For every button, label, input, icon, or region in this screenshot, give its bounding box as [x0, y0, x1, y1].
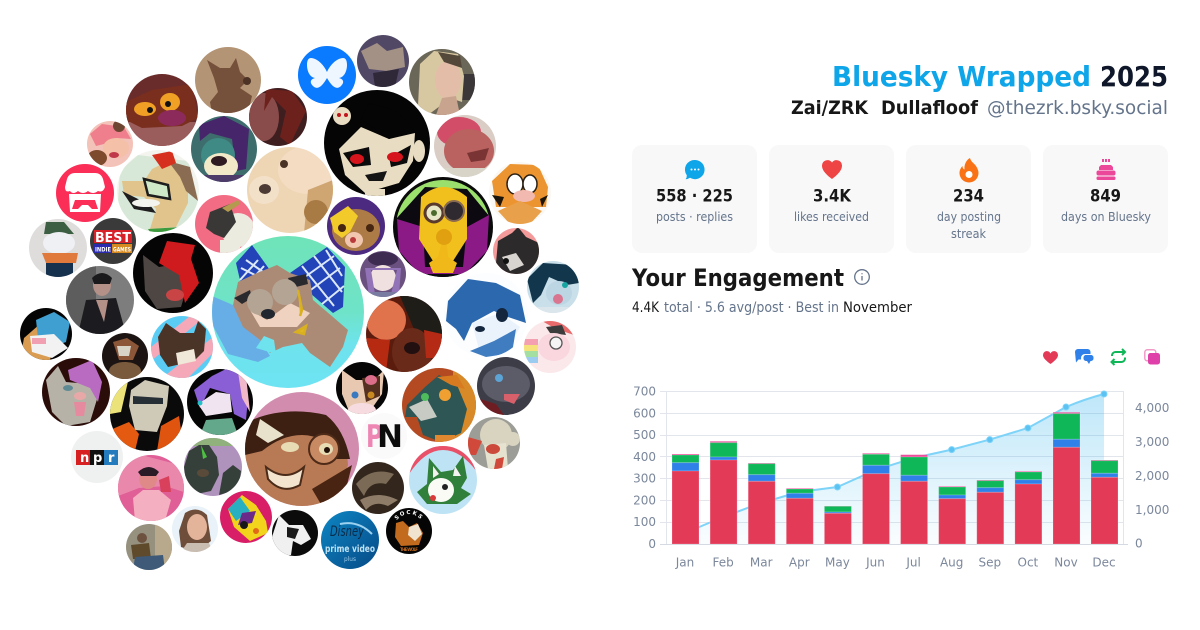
- month labels: May: [825, 556, 850, 570]
- avatar: best indie games: [90, 218, 136, 264]
- right axis labels: 1,000: [1135, 503, 1169, 517]
- avatar: NPR logo: p: [93, 451, 102, 466]
- avatar: man with laptop: [126, 524, 172, 570]
- panel: days on Bluesky: [1043, 145, 1168, 253]
- month labels: [675, 556, 1116, 570]
- month labels: Dec: [1092, 556, 1116, 570]
- avatar: green wolf with orange eye: [402, 368, 476, 442]
- avatar: best indie games: GAMES: [113, 246, 131, 254]
- avatar: disney prime video: [321, 511, 379, 569]
- avatar: golden dog photo: [247, 146, 338, 233]
- title: Bluesky Wrapped: [832, 60, 1091, 93]
- avatar: disney prime video: Disney: [330, 524, 364, 540]
- right axis labels: [1135, 401, 1169, 550]
- avatar: bluesky butterfly logo: [298, 46, 356, 104]
- panel: day posting streak: 234: [953, 186, 984, 206]
- avatar: dog on trans flag: [151, 316, 213, 378]
- avatar: socks the wolf: THE WOLF: [400, 547, 418, 552]
- avatar: best indie games: INDIE: [95, 246, 111, 254]
- chart legend icons: [1043, 349, 1160, 365]
- engagement summary: [632, 300, 912, 316]
- avatar: cartoon face with pink hood: [245, 392, 359, 506]
- right axis labels: 3,000: [1135, 435, 1169, 449]
- left axis labels: 100: [633, 515, 656, 529]
- avatar: red blurry photo: [366, 296, 442, 376]
- panel: likes received: [769, 145, 894, 253]
- engagement summary: November: [843, 300, 912, 316]
- avatar: goat on pink: [195, 195, 255, 253]
- avatar: calico cat on black: [336, 362, 388, 417]
- avatar: disney prime video: prime video: [325, 544, 375, 555]
- panel: posts and replies: posts · replies: [656, 210, 733, 224]
- avatar: brown dog sketch: [195, 47, 261, 113]
- avatar: NPR logo: r: [108, 451, 115, 466]
- avatar: man in black jacket: [66, 266, 134, 334]
- avatar: green rabbit on blue: [409, 446, 477, 514]
- avatar: NPR logo: [71, 431, 123, 483]
- left axis labels: 0: [648, 537, 656, 551]
- avatar: dark grey fuzzy wolf: [477, 357, 535, 415]
- bar: Oct: [1015, 471, 1042, 544]
- avatar: purple haired glasses character: [360, 251, 406, 297]
- bar: Jun: [862, 453, 890, 544]
- avatar: itch.io logo: [56, 164, 114, 222]
- month labels: Aug: [940, 556, 963, 570]
- avatar: socks the wolf: SOCKS: [394, 510, 422, 520]
- avatar: red haired dark wolf: [133, 233, 213, 313]
- icon: quote legend: [1145, 350, 1160, 364]
- stacked bars: [672, 412, 1118, 544]
- month labels: Sep: [978, 556, 1001, 570]
- avatar: goggled old man: [110, 377, 184, 451]
- profile name and handle: Zai/ZRK: [791, 97, 869, 119]
- left axis labels: 300: [633, 472, 656, 486]
- bar: Dec: [1091, 460, 1118, 544]
- avatar: black and white husky: [272, 510, 318, 556]
- panel: days on Bluesky: days on Bluesky: [1061, 210, 1151, 224]
- avatar: PN logo: [361, 413, 407, 459]
- icon: cake: [1096, 159, 1116, 180]
- panel: likes received: 3.4K: [813, 186, 852, 206]
- panel: posts and replies: 558 · 225: [656, 186, 733, 206]
- avatar: white rat with pink hair: [42, 358, 110, 426]
- month labels: Jun: [865, 556, 885, 570]
- panel: day posting streak: day posting: [937, 210, 1001, 224]
- month labels: Jul: [905, 556, 921, 570]
- bar: Nov: [1053, 412, 1080, 544]
- icon: chat bubble: [685, 160, 705, 179]
- avatar: dark teal haired character: [527, 261, 579, 313]
- left axis labels: [633, 384, 656, 551]
- avatar: grey mouse with red bow: [468, 417, 520, 469]
- bar: Aug: [939, 486, 966, 544]
- avatar: purple fox: [187, 369, 253, 435]
- avatar: green-black wolf on purple: [184, 438, 242, 496]
- left axis labels: 500: [633, 428, 656, 442]
- panel: likes received: likes received: [794, 210, 869, 224]
- avatar: blonde woman: [409, 49, 475, 115]
- avatar: blue and white fox on black: [20, 308, 72, 360]
- panel: posts and replies: [632, 145, 757, 253]
- avatar cluster: [20, 35, 579, 570]
- profile name and handle: @thezrk.bsky.social: [987, 97, 1168, 119]
- avatar: colorful cat on magenta: [220, 491, 272, 543]
- bar: Sep: [977, 480, 1004, 544]
- panel: day posting streak: [906, 145, 1031, 253]
- month labels: Oct: [1018, 556, 1039, 570]
- avatar: pink sheep with rainbow: [524, 321, 576, 373]
- cumulative area: [685, 394, 1104, 544]
- left axis labels: 700: [633, 384, 656, 398]
- avatar: pink haired character: [87, 120, 133, 167]
- month labels: Jan: [675, 556, 694, 570]
- avatar: NPR logo: n: [80, 451, 89, 466]
- profile name and handle: Dullafloof: [881, 97, 979, 119]
- bar: Feb: [710, 441, 737, 544]
- heading: your engagement: Your Engagement: [631, 264, 844, 292]
- icon: like legend: [1043, 351, 1058, 364]
- cumulative line: [685, 391, 1107, 533]
- bar: Apr: [786, 488, 813, 544]
- left axis labels: 400: [633, 450, 656, 464]
- bar: Jul: [901, 455, 928, 544]
- chart grid and axes: [660, 391, 1128, 544]
- icon: info: [855, 270, 869, 284]
- title: 2025: [1100, 60, 1168, 93]
- avatar: purple haired teal character: [191, 116, 257, 183]
- avatar: smiling woman: [172, 506, 218, 552]
- bar: May: [824, 506, 851, 544]
- month labels: Mar: [750, 556, 773, 570]
- avatar: man on pink background: [118, 455, 184, 521]
- panel: day posting streak: streak: [951, 227, 986, 241]
- panel: days on Bluesky: 849: [1090, 186, 1121, 206]
- avatar: best indie games: BEST: [95, 231, 131, 246]
- avatar: red haired figure: [249, 88, 307, 146]
- month labels: Feb: [712, 556, 734, 570]
- avatar: raccoon on dark: [102, 333, 148, 380]
- avatar: white wolf with scarf: [29, 219, 87, 277]
- avatar: wolf group on purple: [357, 35, 409, 87]
- chart: monthly engagement: [633, 384, 1169, 570]
- icon: heart: [822, 160, 842, 179]
- avatar: tiger with glasses: [489, 162, 551, 224]
- avatar: socks the wolf: [386, 508, 432, 554]
- avatar: black haired character: [324, 90, 430, 196]
- avatar: gas mask: [393, 177, 493, 277]
- engagement summary: total · 5.6 avg/post · Best in: [664, 300, 839, 316]
- bar: Jan: [672, 454, 699, 544]
- month labels: Nov: [1054, 556, 1078, 570]
- right axis labels: 4,000: [1135, 401, 1169, 415]
- right axis labels: 2,000: [1135, 469, 1169, 483]
- left axis labels: 200: [633, 494, 656, 508]
- engagement summary: 4.4K: [632, 300, 660, 316]
- avatar: green glasses dog: [117, 150, 199, 232]
- avatar: disney prime video: plus: [344, 556, 356, 563]
- avatar: large furry with blue wings: [212, 236, 364, 388]
- avatar: pink blurry face: [434, 115, 496, 178]
- avatar: yellow hamster: [327, 197, 385, 255]
- left axis labels: 600: [633, 406, 656, 420]
- icon: flame: [960, 158, 978, 182]
- avatar: PN logo: N: [377, 419, 403, 455]
- profile name and handle: [791, 97, 1168, 119]
- avatar: PN logo: P: [366, 419, 383, 455]
- avatar: dark brown blur: [352, 462, 404, 514]
- icon: reply legend: [1075, 349, 1094, 364]
- avatar: blue haired white creature: [446, 279, 526, 357]
- avatar: orange-eyed creature: [126, 74, 198, 146]
- bar: Mar: [748, 463, 775, 544]
- right axis labels: 0: [1135, 536, 1143, 550]
- month labels: Apr: [789, 556, 810, 570]
- avatar: black wolf on pink: [493, 227, 539, 274]
- icon: repost legend: [1112, 349, 1125, 365]
